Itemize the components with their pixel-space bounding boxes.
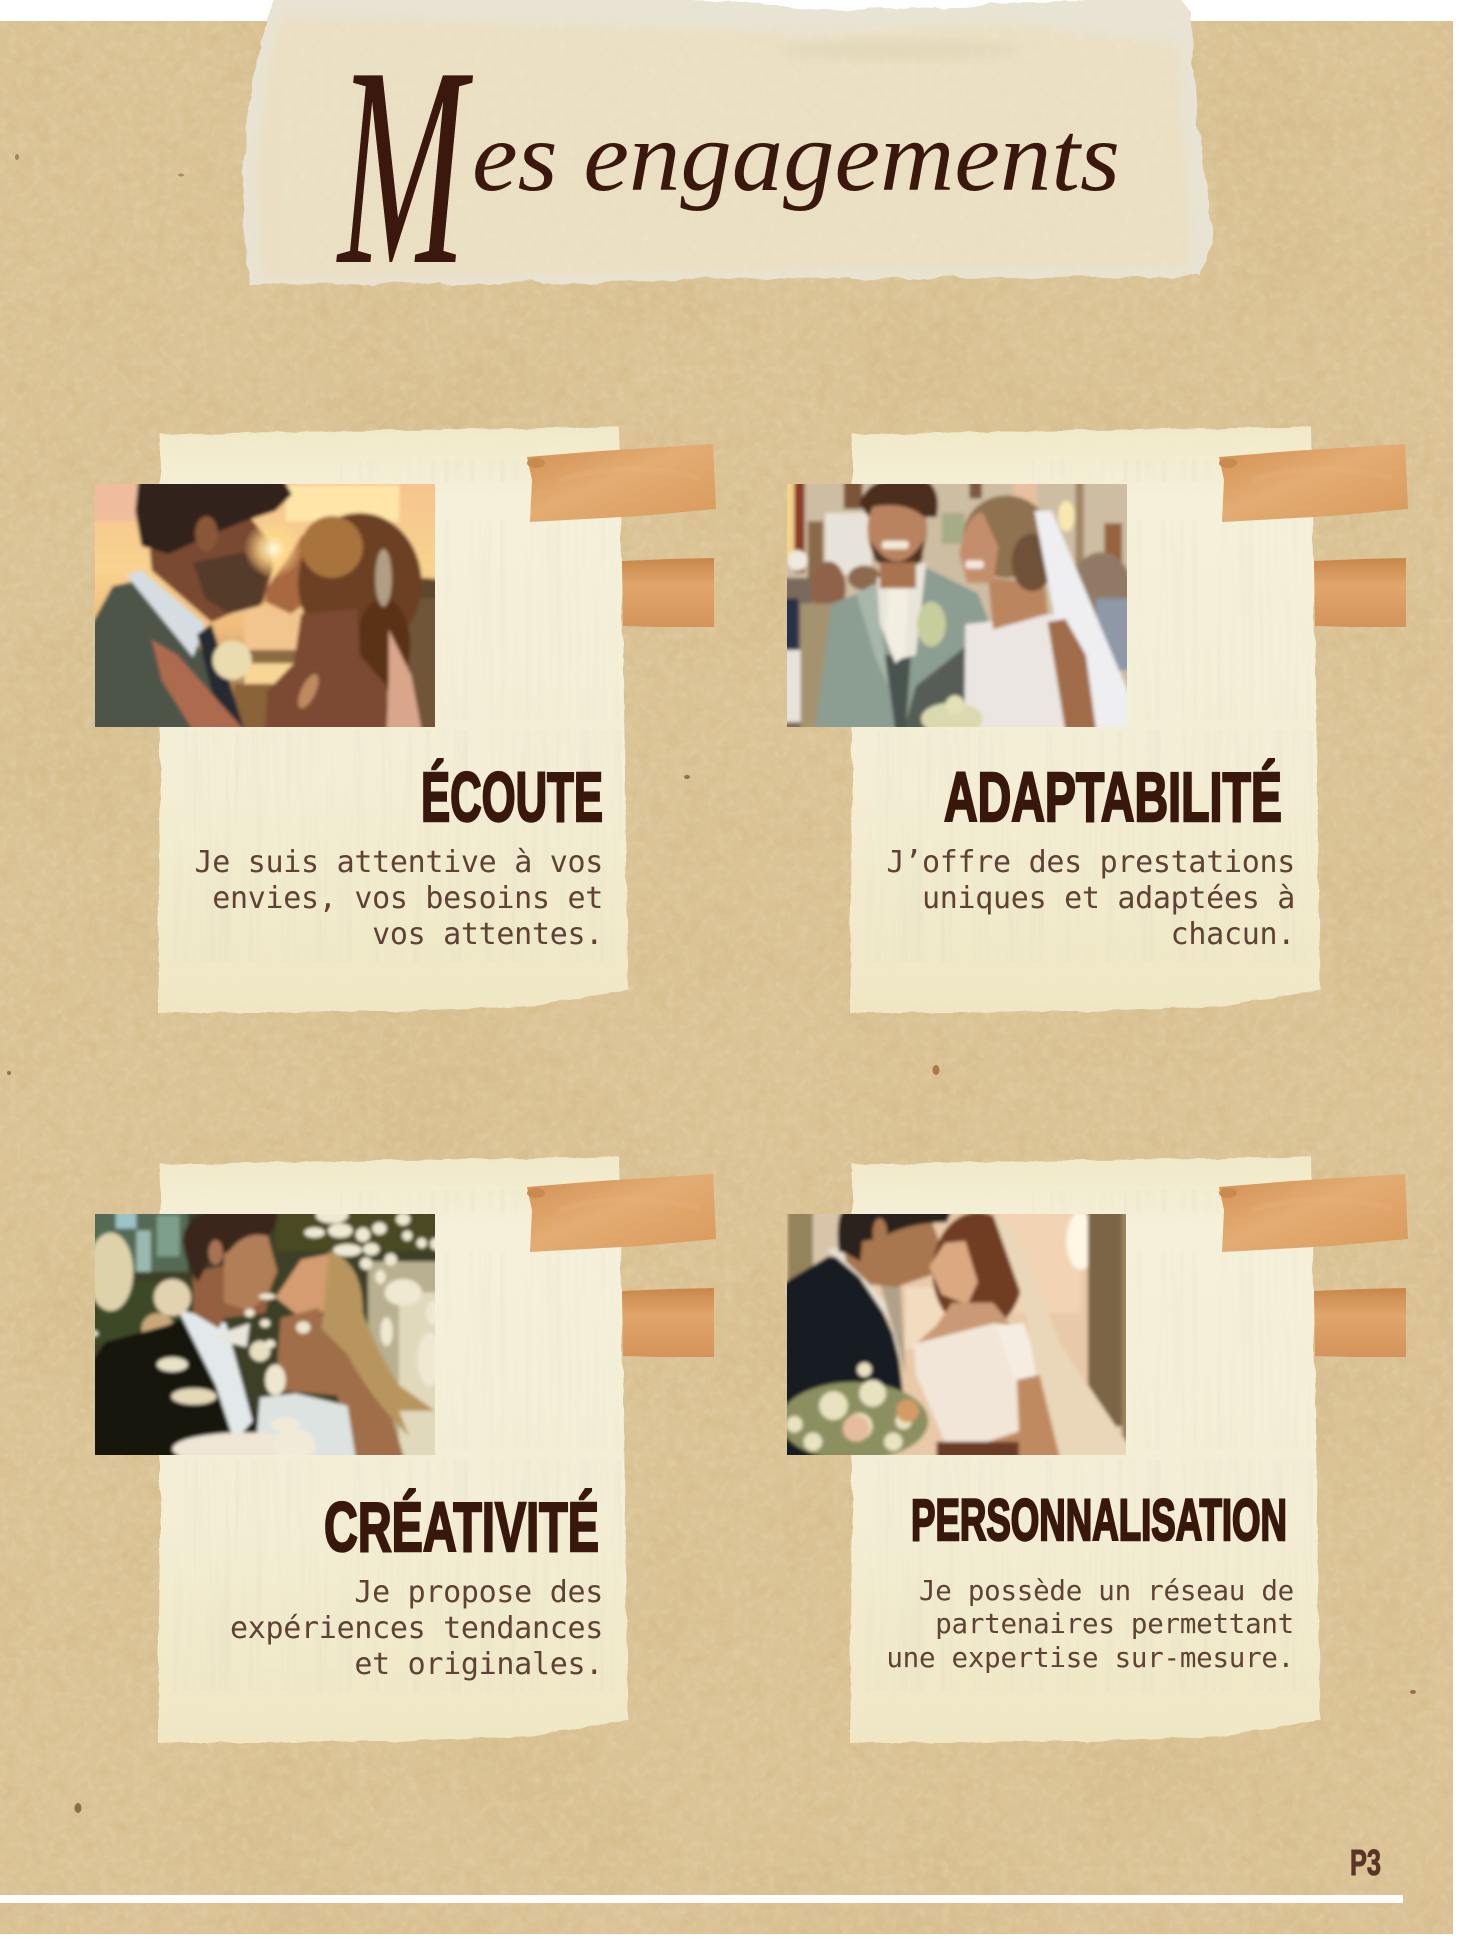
- body text: partenaires permettant: [935, 1608, 1294, 1640]
- panel: Personnalisation: [780, 1157, 1408, 1742]
- page number: P3: [1350, 1842, 1381, 1883]
- tape strips: [1219, 1174, 1408, 1357]
- body text: uniques et adaptées à: [922, 881, 1295, 916]
- heading: ÉCOUTE: [421, 758, 603, 836]
- panel: Adaptabilité: [782, 427, 1408, 1012]
- title: es engagements: [472, 101, 1120, 212]
- tape strips: [1219, 444, 1408, 627]
- panel: Créativité: [82, 1157, 716, 1742]
- body text: une expertise sur-mesure.: [886, 1642, 1294, 1674]
- torn title paper: [241, 0, 1212, 286]
- body text: Je possède un réseau de: [919, 1575, 1294, 1607]
- title: M: [336, 8, 475, 324]
- body text: Je suis attentive à vos: [194, 845, 603, 880]
- photo: couple under petals: [95, 1214, 435, 1455]
- body text: Je propose des: [354, 1575, 603, 1610]
- panel: Écoute: [90, 427, 716, 1012]
- body text: et originales.: [354, 1647, 603, 1682]
- heading: ADAPTABILITÉ: [944, 758, 1282, 836]
- body text: envies, vos besoins et: [212, 881, 603, 916]
- torn note paper: [158, 427, 628, 1012]
- photo: couple forehead to forehead: [787, 1214, 1126, 1455]
- photo: laughing couple in church: [787, 484, 1127, 727]
- torn note paper: [850, 1157, 1320, 1742]
- body text: J’offre des prestations: [886, 845, 1295, 880]
- white footer rule: [0, 1895, 1403, 1903]
- photo: couple at sunset: [95, 484, 435, 727]
- torn note paper: [850, 427, 1320, 1012]
- torn note paper: [158, 1157, 628, 1742]
- body text: expériences tendances: [230, 1611, 603, 1646]
- tape strips: [527, 1174, 716, 1357]
- heading: CRÉATIVITÉ: [324, 1488, 599, 1566]
- body text: chacun.: [1171, 917, 1295, 952]
- tape strips: [527, 444, 716, 627]
- body text: vos attentes.: [372, 917, 603, 952]
